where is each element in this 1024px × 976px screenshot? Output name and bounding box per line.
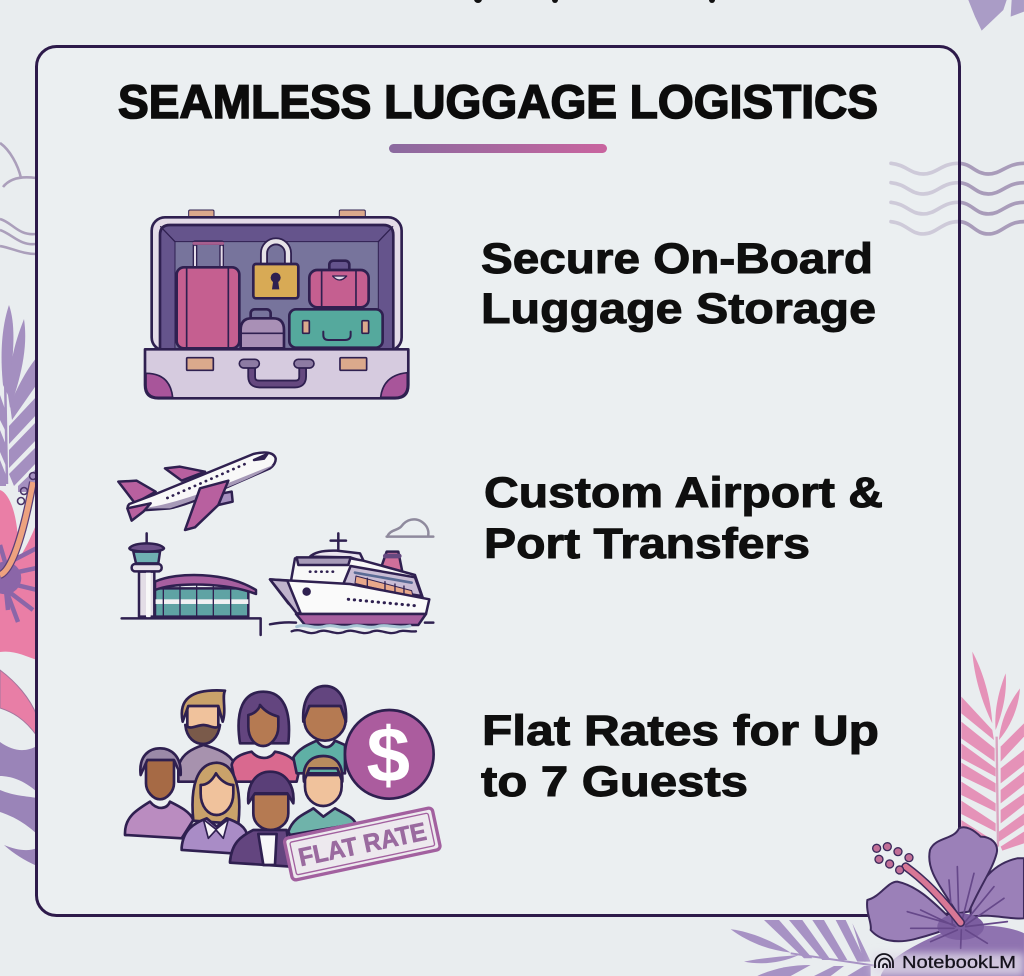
- suitcase: pink bag: [309, 261, 369, 307]
- flat rate stamp: FLAT RATE: [296, 818, 429, 872]
- cut-off text fragment at top edge: [474, 0, 715, 3]
- decor: right pink palm: [961, 652, 1024, 851]
- dollar coin: [345, 710, 434, 799]
- suitcase: base with handle: [145, 349, 408, 398]
- back row guests: [178, 686, 346, 782]
- text: flat rates: to 7 Guests: [481, 758, 748, 806]
- decor: top right leaf: [968, 0, 1024, 31]
- text: secure storage: Luggage Storage: [481, 285, 876, 333]
- icon: group of guests with flat rate: [125, 686, 441, 881]
- airport terminal and tower: [122, 533, 261, 635]
- suitcase: padlock: [253, 241, 298, 298]
- watermark: NotebookLM: [872, 952, 1024, 976]
- text: flat rates: Flat Rates for Up: [482, 707, 879, 755]
- title underline: [389, 144, 607, 153]
- decor: left pink leaf: [0, 670, 37, 736]
- decor: left side botanicals: [0, 143, 37, 866]
- plane: [118, 453, 276, 530]
- text: secure storage: Secure On-Board: [481, 235, 873, 283]
- watermark: NotebookLM: NotebookLM: [902, 952, 1016, 972]
- front row guests: [125, 748, 356, 867]
- suitcase: large pink case: [177, 243, 239, 348]
- decor: right waves: [891, 163, 1024, 234]
- decor: bottom right purple hibiscus: [867, 827, 1024, 976]
- suitcase: small lilac bag: [241, 309, 284, 348]
- title: SEAMLESS LUGGAGE LOGISTICS: [118, 75, 878, 128]
- icon: open suitcase: [145, 210, 408, 398]
- decor: left cloud and waves: [0, 143, 36, 254]
- cloud: [387, 519, 433, 537]
- decor: bottom purple palm: [731, 920, 877, 976]
- icon: plane, airport and cruise ship: [118, 453, 433, 635]
- watermark icon: [875, 954, 893, 968]
- text: transfers: Port Transfers: [484, 520, 810, 568]
- decor: left pink hibiscus: [0, 472, 37, 660]
- cruise ship: [270, 533, 433, 633]
- decor: left purple leaf: [0, 742, 37, 866]
- decor: left palm: [0, 305, 37, 492]
- text: transfers: Custom Airport &: [484, 469, 883, 517]
- dollar coin: $: [367, 711, 410, 799]
- suitcase: teal case: [289, 309, 383, 348]
- flat rate stamp: [284, 807, 441, 881]
